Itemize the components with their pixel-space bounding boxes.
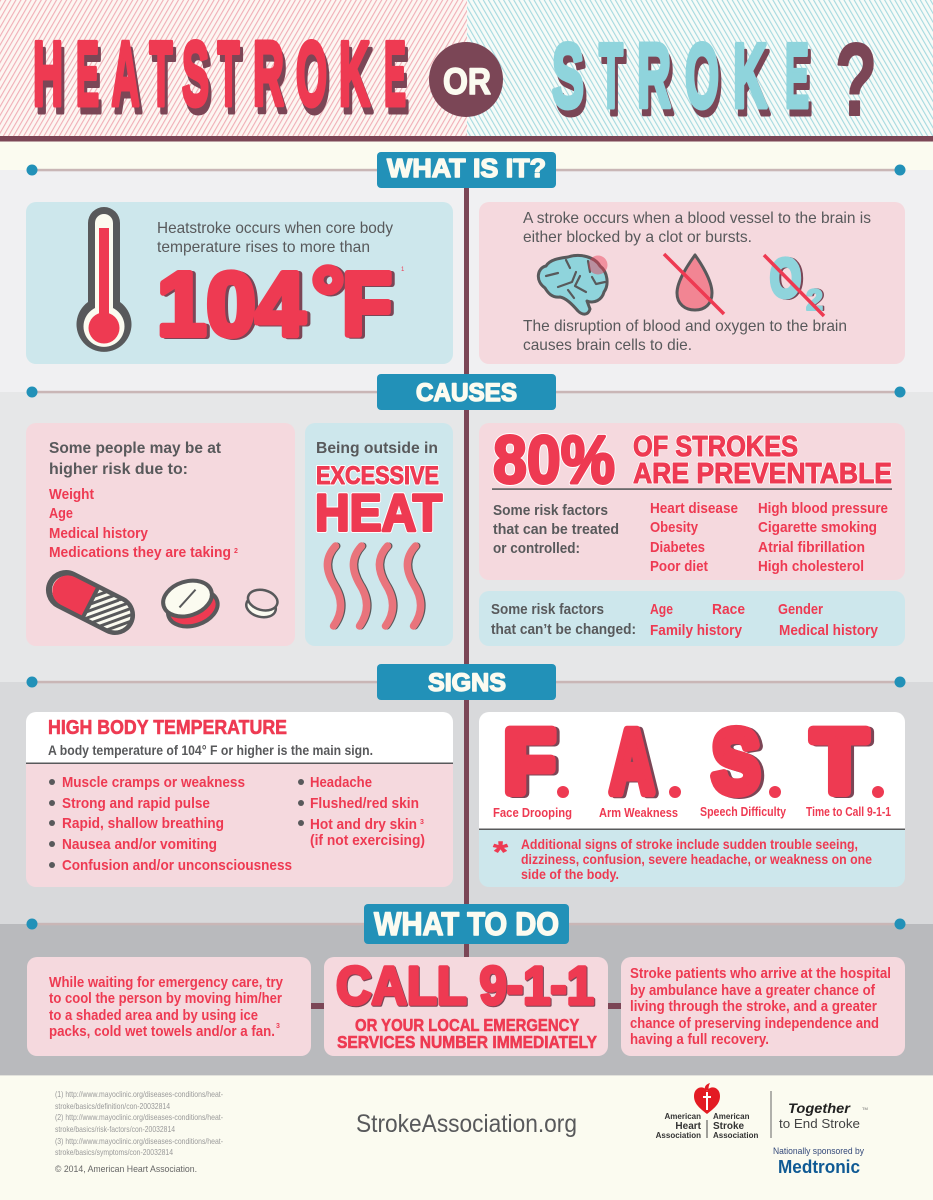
letters: F A S T: A xyxy=(610,711,654,811)
panel: fast xyxy=(479,711,905,887)
heading: of strokes are preventable xyxy=(633,431,892,490)
heading: call 9-1-1: CALL 9-1-1 xyxy=(336,956,594,1016)
references: stroke/basics/risk-factors/con-20032814 xyxy=(55,1124,175,1134)
heading: excessive heat xyxy=(315,462,442,542)
list: treatable risks column 2: High blood pressure xyxy=(758,500,888,517)
logo: medtronic sponsor: Medtronic xyxy=(778,1156,860,1177)
heading: causes xyxy=(377,374,556,410)
letters: F A S T shadow: A xyxy=(613,712,657,812)
heading: of strokes are preventable: ARE PREVENTABLE xyxy=(633,458,892,490)
letters: F A S T shadow: F xyxy=(507,712,558,812)
references: stroke/basics/definition/con-20032814 xyxy=(55,1101,170,1111)
letters: F A S T shadow: S xyxy=(715,712,763,812)
text: main sign: A body temperature of 104° F or higher is the main sign. xyxy=(48,742,373,758)
list: signs column 1: Strong and rapid pulse xyxy=(62,795,210,812)
text: E xyxy=(788,33,812,134)
section rule: signs xyxy=(26,676,906,688)
title: stroke: K xyxy=(733,26,767,127)
text: disruption: causes brain cells to die. xyxy=(523,337,692,354)
heading: signs: SIGNS xyxy=(428,669,506,697)
panel: heatstroke definition xyxy=(26,202,453,364)
heading: of strokes are preventable: OF STROKES xyxy=(633,431,798,463)
title: heatstroke: T xyxy=(218,24,240,125)
title: stroke: T xyxy=(599,26,623,127)
panel: preventable strokes xyxy=(479,422,905,580)
text: or your local emergency: SERVICES NUMBER IMMEDIATELY xyxy=(337,1032,597,1052)
panel: unchangeable risks xyxy=(479,591,905,646)
badge: or xyxy=(429,42,503,117)
badge: or: OR xyxy=(443,61,491,102)
text: american heart association xyxy=(656,1112,702,1140)
title: heatstroke: O xyxy=(296,24,327,125)
references: stroke/basics/symptoms/con-20032814 xyxy=(55,1147,173,1157)
title: stroke: T xyxy=(602,33,626,134)
letters: F A S T: S xyxy=(712,711,760,811)
letters: F A S T: T xyxy=(812,711,867,811)
title: stroke: S xyxy=(555,33,587,134)
references: (1) http://www.mayoclinic.org/diseases-conditions/heat- xyxy=(55,1089,223,1099)
list: risk factors: Weight xyxy=(49,486,94,503)
text: american stroke association: Association xyxy=(713,1131,758,1140)
stat: 80 percent: 80% xyxy=(493,422,615,498)
panel: stroke definition xyxy=(479,202,905,364)
list: treatable risks column 2: Atrial fibrillation xyxy=(758,539,865,556)
text: ambulance advice: living through the stroke, and a greater xyxy=(630,999,877,1015)
stat: 104 degrees F: F xyxy=(345,256,395,356)
title: heatstroke: T xyxy=(150,24,172,125)
list: signs column 2: 3 xyxy=(420,819,424,826)
title: heatstroke: R xyxy=(253,24,284,125)
heading: causes: CAUSES xyxy=(416,379,517,407)
text: stroke definition: A stroke occurs when a blood vessel to the brain is xyxy=(523,210,871,227)
text: treatable risk intro: or controlled: xyxy=(493,540,580,557)
references: (3) http://www.mayoclinic.org/diseases-conditions/heat- xyxy=(55,1136,223,1146)
panel: call 911 xyxy=(324,956,608,1056)
text: ambulance advice: by ambulance have a greater chance of xyxy=(630,983,875,999)
stat: 104 degrees F: 104 xyxy=(157,255,305,355)
list: treatable risks column 1: Obesity xyxy=(650,519,699,536)
heading: what is it: WHAT IS IT? xyxy=(387,153,546,183)
list: unchangeable risks: Family history xyxy=(650,622,743,639)
text: american heart association: Association xyxy=(656,1131,701,1140)
stat: 104 degrees F: F xyxy=(342,255,392,355)
text: american stroke association xyxy=(713,1112,758,1140)
letters: F A S T shadow: T xyxy=(815,712,870,812)
text: additional signs: dizziness, confusion, severe headache, or weakness on one xyxy=(521,851,872,867)
list: signs column 1: Rapid, shallow breathing xyxy=(62,815,224,832)
title: stroke xyxy=(552,26,812,134)
icon: capsule xyxy=(43,567,138,638)
icon: brain xyxy=(538,255,608,314)
letters: F A S T shadow xyxy=(507,712,870,812)
text: cooling advice: While waiting for emergency care, try xyxy=(49,975,283,991)
title: stroke: R xyxy=(637,26,671,127)
panel: cooling advice xyxy=(27,957,311,1056)
list: treatable risks column 1: Poor diet xyxy=(650,558,708,575)
heading: excessive heat: EXCESSIVE xyxy=(316,462,439,490)
logo: together to end stroke: Together xyxy=(788,1100,852,1116)
text: E xyxy=(387,31,409,132)
icon: blood drop crossed out xyxy=(664,254,724,314)
stat: 80 percent: 80% xyxy=(493,422,615,498)
title: heatstroke: A xyxy=(114,31,142,132)
text: cooling advice: to a shaded area and by using ice xyxy=(49,1008,258,1024)
list: treatable risks column 1: Diabetes xyxy=(650,539,705,556)
title: heatstroke: S xyxy=(185,31,212,132)
website: StrokeAssociation.org xyxy=(356,1110,577,1138)
text: american heart association: Heart xyxy=(675,1121,702,1132)
icon: oxygen crossed out: 2 xyxy=(808,284,824,317)
list: unchangeable risks: Race xyxy=(712,601,745,618)
heading: signs xyxy=(377,664,556,700)
section rule: what to do xyxy=(26,918,906,930)
text: E xyxy=(785,26,809,127)
heading: of strokes are preventable: ARE PREVENTABLE xyxy=(633,458,892,490)
list: signs column 1: Muscle cramps or weakness xyxy=(62,774,245,791)
text: being outside: Being outside in xyxy=(316,440,438,457)
panel: heatstroke risk xyxy=(26,423,295,646)
central vertical connector xyxy=(464,188,469,957)
letters: F A S T: F xyxy=(504,711,555,811)
logo: american heart and stroke association xyxy=(656,1083,758,1140)
section rule: what is it xyxy=(26,164,906,176)
text: disruption: The disruption of blood and oxygen to the brain xyxy=(523,318,847,335)
title: heatstroke: T xyxy=(152,31,176,132)
icon: oxygen crossed out: O xyxy=(772,249,803,309)
logo: together to end stroke xyxy=(779,1100,868,1131)
text: E xyxy=(384,24,406,125)
text: american heart association: American xyxy=(665,1112,701,1121)
heading: what to do: WHAT TO DO xyxy=(374,906,559,942)
title: heatstroke: K xyxy=(342,31,373,132)
list: risk factors: Age xyxy=(49,505,73,522)
list: signs column 1: Nausea and/or vomiting xyxy=(62,836,217,853)
list: signs column 1: Confusion and/or unconsciousness xyxy=(62,857,292,874)
text: additional signs: side of the body. xyxy=(521,866,619,882)
text: risk intro: higher risk due to: xyxy=(49,461,188,478)
text: risk intro: Some people may be at xyxy=(49,440,222,457)
title: stroke: R xyxy=(640,33,674,134)
panel: heatstroke signs xyxy=(26,712,453,887)
text: american stroke association: Stroke xyxy=(713,1121,745,1132)
captions: F A S T: Face Drooping xyxy=(493,805,572,820)
copyright: © 2014, American Heart Association. xyxy=(55,1164,197,1175)
title: heatstroke: E xyxy=(79,31,102,132)
references: (2) http://www.mayoclinic.org/diseases-conditions/heat- xyxy=(55,1112,223,1122)
title: heatstroke: K xyxy=(339,24,370,125)
list: unchangeable risks: Medical history xyxy=(779,622,879,639)
icon: thermometer xyxy=(76,207,131,352)
text: additional signs: Additional signs of stroke include sudden trouble seeing, xyxy=(521,836,858,852)
captions: F A S T: Speech Difficulty xyxy=(700,804,787,819)
title: stroke: O xyxy=(685,26,719,127)
section rule: causes xyxy=(26,386,906,398)
title: heatstroke: T xyxy=(220,31,242,132)
panel: ambulance advice xyxy=(621,957,905,1056)
list: risk factors: Medical history xyxy=(49,525,149,542)
text: ambulance advice: Stroke patients who arrive at the hospital xyxy=(630,966,891,982)
icon: oxygen crossed out: 2 xyxy=(806,284,823,317)
list: signs column 2: (if not exercising) xyxy=(310,832,425,849)
text: cooling advice: 3 xyxy=(276,1023,280,1030)
stat: 104 degrees F: ° xyxy=(314,251,348,346)
title: heatstroke: A xyxy=(112,24,140,125)
panel: excessive heat xyxy=(305,423,453,646)
stat: 104 degrees F: 104 xyxy=(160,256,308,356)
title: heatstroke: E xyxy=(76,24,99,125)
text: treatable risk intro: Some risk factors xyxy=(493,502,608,519)
text: american stroke association: American xyxy=(713,1112,750,1121)
captions: F A S T: Arm Weakness xyxy=(599,805,678,820)
text: treatable risk intro: that can be treated xyxy=(493,521,619,538)
title: heatstroke xyxy=(33,24,409,132)
heading: excessive heat: EXCESSIVE xyxy=(316,462,439,490)
text: cooling advice: to cool the person by moving him/her xyxy=(49,991,282,1007)
list: treatable risks column 2: High cholesterol xyxy=(758,558,864,575)
text: heatstroke definition: temperature rises to more than xyxy=(157,239,370,256)
list: signs column 2: Headache xyxy=(310,774,372,791)
heading: high body temperature: HIGH BODY TEMPERATURE xyxy=(48,717,287,739)
logo: together to end stroke: TM xyxy=(862,1106,868,1111)
title: heatstroke: O xyxy=(299,31,330,132)
icon: oxygen crossed out: O xyxy=(770,248,801,308)
heading: of strokes are preventable: OF STROKES xyxy=(633,431,798,463)
text: or your local emergency: OR YOUR LOCAL EMERGENCY xyxy=(355,1015,580,1035)
title: heatstroke: H xyxy=(36,31,66,132)
stat: 104 degrees F xyxy=(157,250,405,356)
list: signs column 2: Flushed/red skin xyxy=(310,795,419,812)
title: heatstroke: S xyxy=(182,24,209,125)
list: treatable risks column 2: Cigarette smoking xyxy=(758,519,877,536)
logo: medtronic sponsor: Nationally sponsored by xyxy=(773,1146,864,1157)
text: unchangeable intro: that can’t be changed: xyxy=(491,621,636,638)
logo: medtronic sponsor xyxy=(773,1146,864,1177)
icon: small pill xyxy=(244,587,280,620)
icon: heart and torch xyxy=(694,1083,720,1114)
header background xyxy=(0,0,933,142)
connectors between action panels xyxy=(311,1003,622,1009)
icon: asterisk: * xyxy=(493,836,508,869)
title: heatstroke: H xyxy=(33,24,63,125)
icon: round pill xyxy=(158,574,222,633)
heading: excessive heat: HEAT xyxy=(315,484,442,542)
list: treatable risks column 1: Heart disease xyxy=(650,500,738,517)
title: heatstroke: R xyxy=(256,31,287,132)
list: signs column 2: Hot and dry skin xyxy=(310,816,417,833)
list: risk factors: 2 xyxy=(234,548,238,555)
text: unchangeable intro: Some risk factors xyxy=(491,601,604,618)
footer rule xyxy=(0,1075,933,1076)
title: stroke: K xyxy=(736,33,770,134)
text: stroke definition: either blocked by a clot or bursts. xyxy=(523,229,752,246)
heading: call 9-1-1: CALL 9-1-1 xyxy=(337,957,595,1017)
heading: excessive heat: HEAT xyxy=(315,484,442,542)
list: unchangeable risks: Age xyxy=(650,601,673,618)
title: stroke: S xyxy=(552,26,584,127)
text: ambulance advice: chance of preserving independence and xyxy=(630,1016,879,1032)
text: ambulance advice: having a full recovery. xyxy=(630,1032,769,1048)
captions: F A S T: Time to Call 9-1-1 xyxy=(806,804,891,819)
stat: 104 degrees F: 1 xyxy=(401,267,405,273)
letters: F A S T xyxy=(504,711,867,811)
periods xyxy=(557,786,884,798)
text: cooling advice: packs, cold wet towels and/or a fan. xyxy=(49,1024,275,1040)
logo: together to end stroke: to End Stroke xyxy=(779,1116,860,1131)
bullets xyxy=(49,779,304,868)
list: unchangeable risks: Gender xyxy=(778,601,823,618)
icon: oxygen crossed out xyxy=(764,248,824,317)
text: heatstroke definition: Heatstroke occurs when core body xyxy=(157,220,393,237)
title: question mark: ? xyxy=(835,22,877,137)
icon: heat waves xyxy=(327,546,422,626)
stat: 104 degrees F: ° xyxy=(311,250,345,345)
title: stroke: O xyxy=(688,33,722,134)
list: risk factors: Medications they are taking xyxy=(49,544,231,561)
